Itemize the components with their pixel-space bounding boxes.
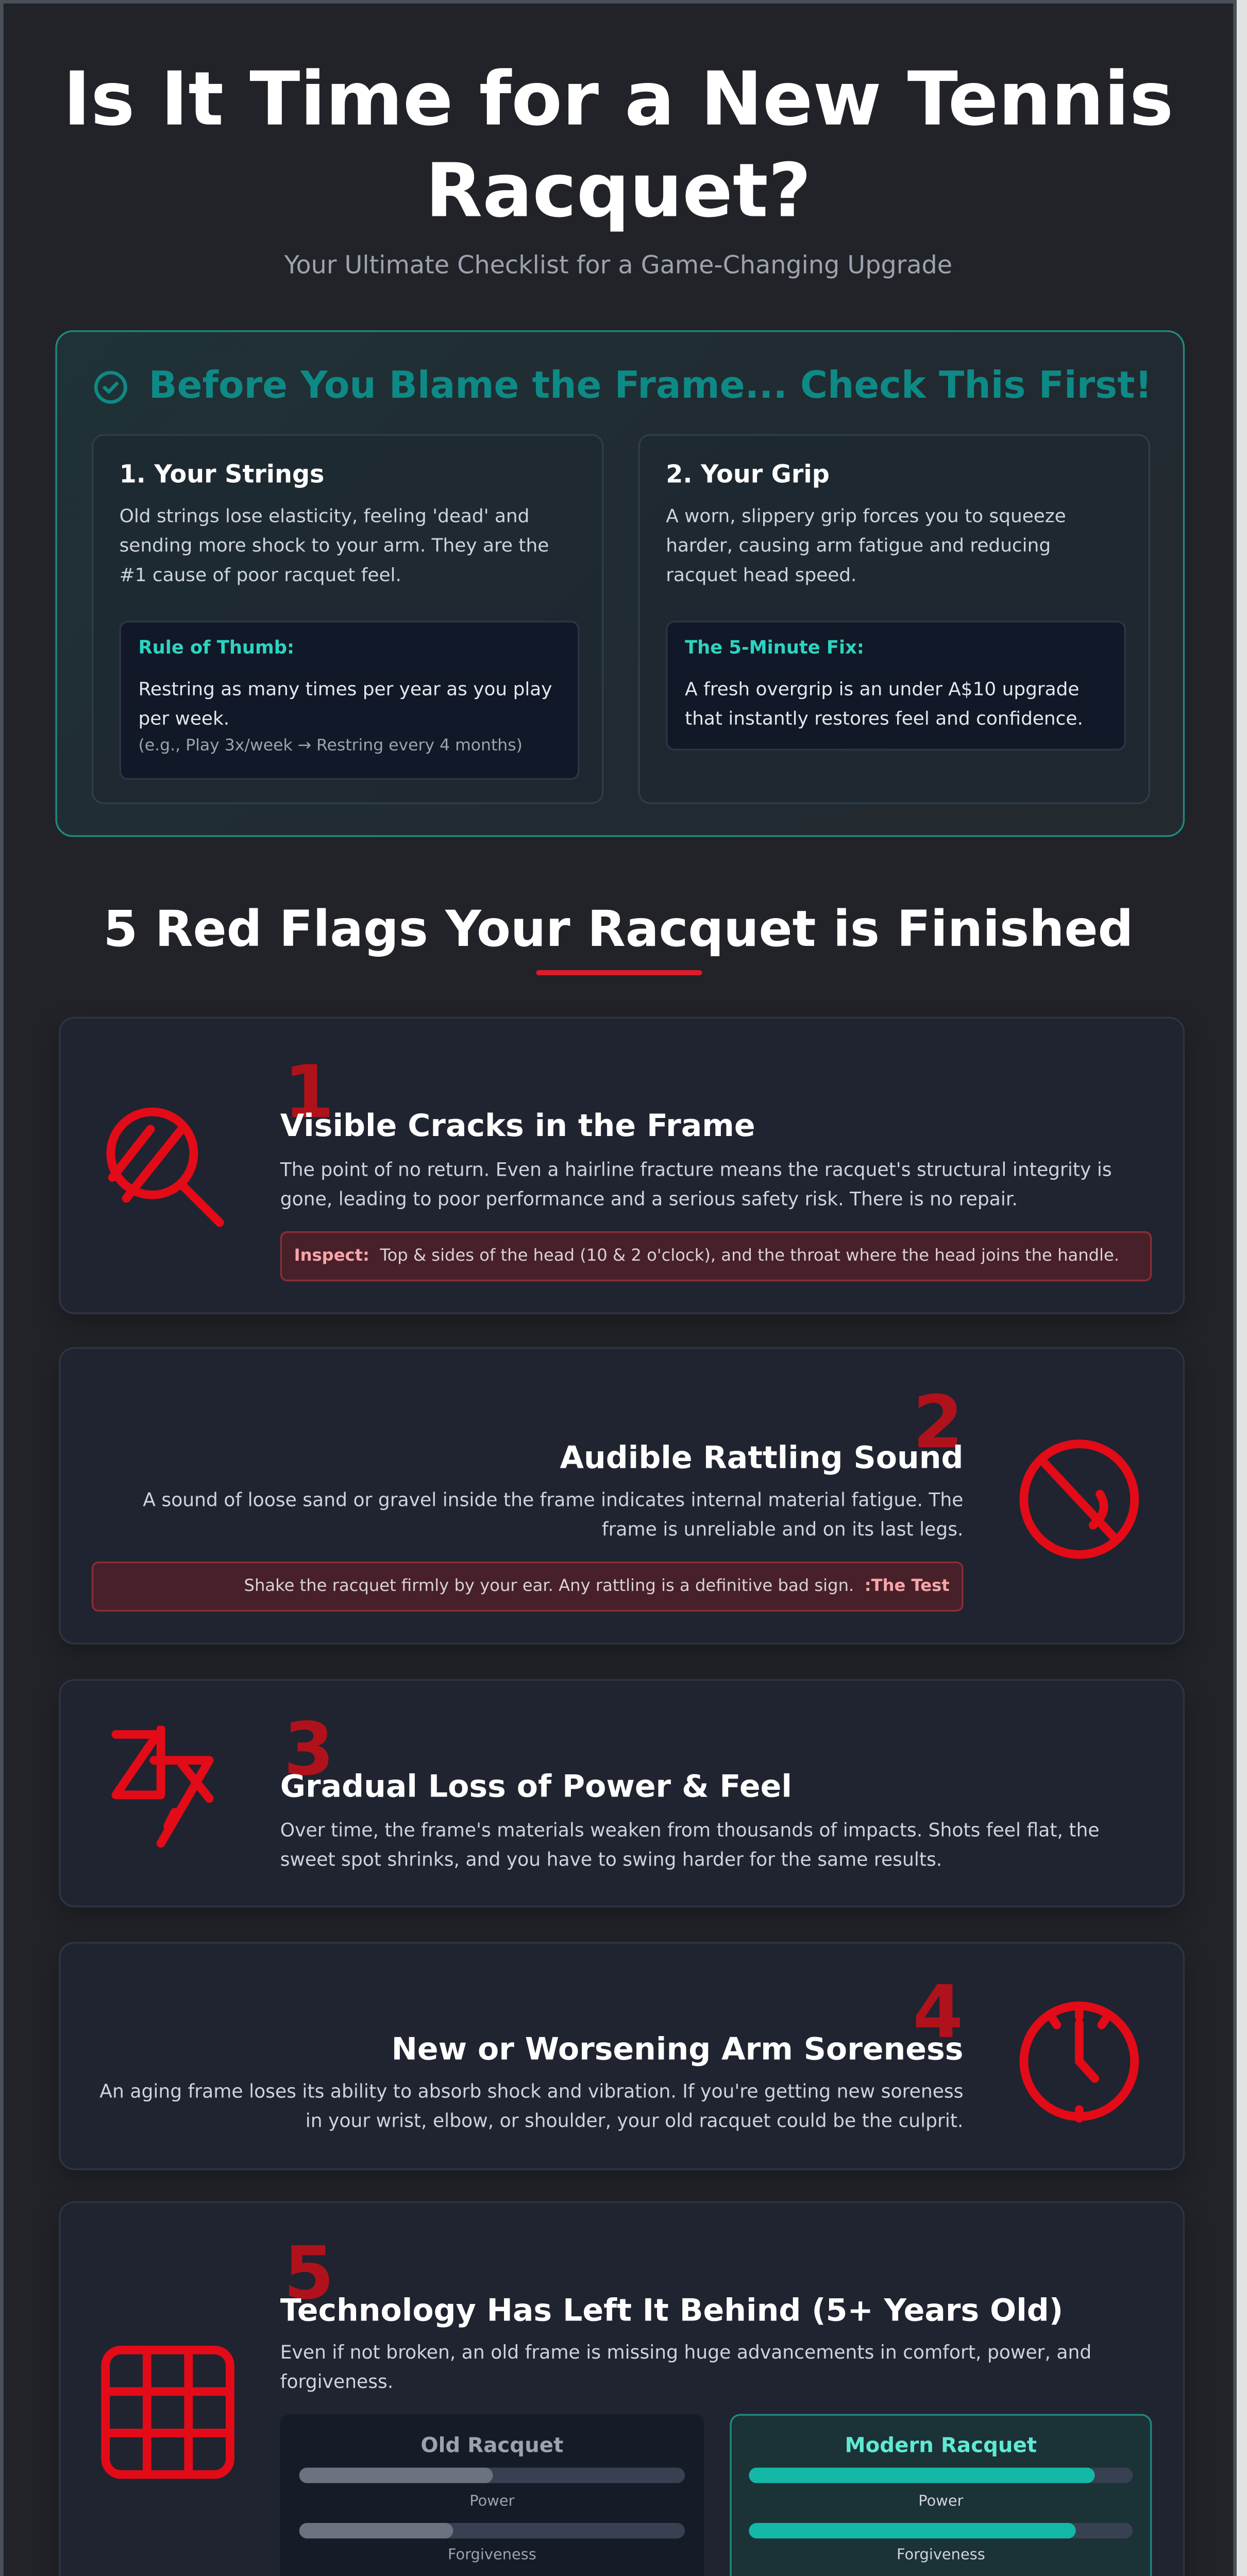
panel: flag 5 [59,2201,1185,2576]
number 5: 5 [283,2231,334,2315]
card: your strings [92,434,603,804]
text: forgiveness. [280,2371,393,2393]
card: your grip [638,434,1150,804]
text [143,1489,964,1541]
text: A sound of loose sand or gravel inside the frame indicates internal material fatigue. The [143,1489,964,1511]
title: Audible Rattling Sound [560,1440,964,1477]
heading: 5 red flags: 5 Red Flags Your Racquet is Finished [104,899,1133,958]
panel: flag 3 [59,1679,1185,1907]
text [280,2342,1091,2393]
card: your grip: 2. Your Grip [666,462,830,489]
card: your grip: racquet head speed. [666,564,856,586]
callout: inspect: Inspect: Top & sides of the head (10 & 2 o'clock), and the throat where the head joins the handle. [294,1247,1119,1266]
callout: rule of thumb: per week. [139,707,229,730]
icon: cracked magnifier [106,1108,224,1227]
callout: rule of thumb: (e.g., Play 3x/week → Restring every 4 months) [139,737,523,756]
panel: check this first [55,330,1185,837]
chart: old racquet: Power [469,2494,514,2511]
card: your grip: harder, causing arm fatigue and reducing [666,534,1051,557]
card: your strings: Old strings lose elasticity, feeling 'dead' and [120,505,529,528]
text [280,1159,1112,1210]
panel: flag 1 [59,1017,1185,1314]
panel: flag 2 [59,1347,1185,1645]
icon: grid [101,2346,234,2479]
chart: modern racquet: Power [918,2494,963,2511]
text: gone, leading to poor performance and a serious safety risk. There is no repair. [280,1188,1018,1210]
text: Even if not broken, an old frame is missing huge advancements in comfort, power, and [280,2342,1091,2364]
callout: rule of thumb [120,621,579,780]
text: Over time, the frame's materials weaken from thousands of impacts. Shots feel flat, the [280,1819,1100,1842]
text: frame is unreliable and on its last legs. [602,1518,964,1541]
title: Visible Cracks in the Frame [280,1108,755,1145]
chart: old racquet: Forgiveness [448,2547,536,2565]
panel: flag 4 [59,1942,1185,2170]
callout: inspect [280,1231,1152,1281]
icon: clock [1019,2002,1139,2123]
title: Technology Has Left It Behind (5+ Years Old) [280,2293,1063,2329]
text [99,2080,964,2132]
chart: modern racquet: Modern Racquet [845,2433,1037,2457]
text: in your wrist, elbow, or shoulder, your old racquet could be the culprit. [306,2110,964,2132]
card: your strings: #1 cause of poor racquet feel. [120,564,401,586]
title: Is It Time for a New Tennis [63,57,1173,144]
chart: old racquet [280,2414,704,2576]
card: your grip: A worn, slippery grip forces you to squeeze [666,505,1066,528]
icon: broken lightning [111,1726,213,1848]
number 3: 3 [283,1707,334,1791]
title: Gradual Loss of Power & Feel [280,1769,792,1805]
card: your strings: 1. Your Strings [120,462,324,489]
icon: prohibited circle [1019,1439,1139,1559]
callout: 5-minute fix: that instantly restores feel and confidence. [685,707,1083,730]
text: The point of no return. Even a hairline fracture means the racquet's structural integrity is [280,1159,1112,1181]
card: your strings: sending more shock to your arm. They are the [120,534,549,557]
chart: old racquet: Old Racquet [420,2433,563,2457]
icon: check circle [94,371,127,404]
title: Racquet? [425,149,811,235]
subtitle: Your Ultimate Checklist for a Game-Changing Upgrade [284,252,952,280]
callout: the test [92,1562,964,1612]
title [63,57,1173,235]
number 4: 4 [913,1970,964,2054]
callout: the test: Shake the racquet firmly by your ear. Any rattling is a definitive bad sign. :The Test [244,1577,950,1596]
text: An aging frame loses its ability to absorb shock and vibration. If you're getting new soreness [99,2080,964,2103]
callout: 5-minute fix: The 5-Minute Fix: [685,638,864,659]
callout: 5-minute fix: A fresh overgrip is an under A$10 upgrade [685,678,1079,700]
heading: before you blame the frame: Before You Blame the Frame... Check This First! [149,365,1152,408]
callout: rule of thumb: Rule of Thumb: [139,638,294,659]
text [280,1819,1100,1871]
callout: 5-minute fix [666,621,1126,751]
number 1: 1 [283,1049,334,1134]
chart: modern racquet: Forgiveness [897,2547,985,2565]
title: New or Worsening Arm Soreness [392,2032,964,2068]
text: sweet spot shrinks, and you have to swing harder for the same results. [280,1849,942,1871]
number 2: 2 [913,1380,964,1465]
callout: rule of thumb: Restring as many times per year as you play [139,678,552,700]
chart: modern racquet [730,2414,1152,2576]
